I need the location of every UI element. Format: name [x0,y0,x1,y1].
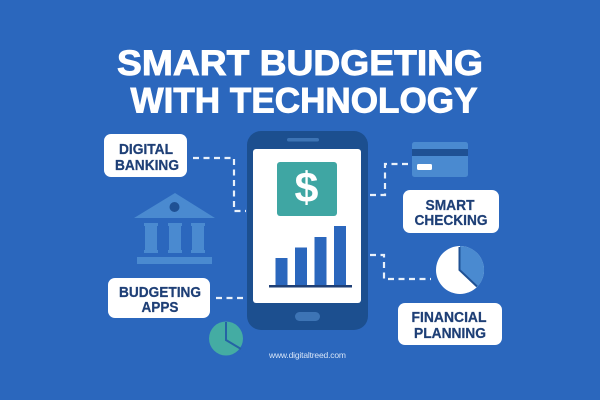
title [117,44,483,120]
icon: bank building [134,193,215,264]
icon: dollar tile [277,162,337,216]
title: SMART BUDGETING [117,44,483,83]
icon: smartphone [247,131,368,330]
label: smart checking: SMART [426,198,475,214]
label: financial planning: FINANCIAL [412,310,487,326]
label: digital banking: DIGITAL [119,142,173,158]
arrow: smart checking connector [370,164,408,195]
icon: white pie chart [436,246,484,294]
label: smart checking: CHECKING [414,213,488,229]
label: digital banking: BANKING [115,158,179,174]
bar chart [269,226,352,288]
icon: teal pie chart [209,322,243,356]
arrow: digital banking connector [193,158,246,211]
website url: www.digitaltreed.com [268,350,346,360]
icon: dollar tile: $ [295,164,319,212]
icon: credit card [412,142,468,177]
arrow: financial planning connector [370,255,431,279]
label: smart checking [403,190,499,233]
label: budgeting apps: BUDGETING [119,285,201,301]
label: financial planning [398,303,502,345]
label: digital banking [104,134,187,177]
arrow: budgeting apps connector [216,297,246,299]
label: financial planning: PLANNING [414,326,486,342]
label: budgeting apps: APPS [142,300,179,316]
label: budgeting apps [108,278,210,318]
title: WITH TECHNOLOGY [130,82,478,120]
